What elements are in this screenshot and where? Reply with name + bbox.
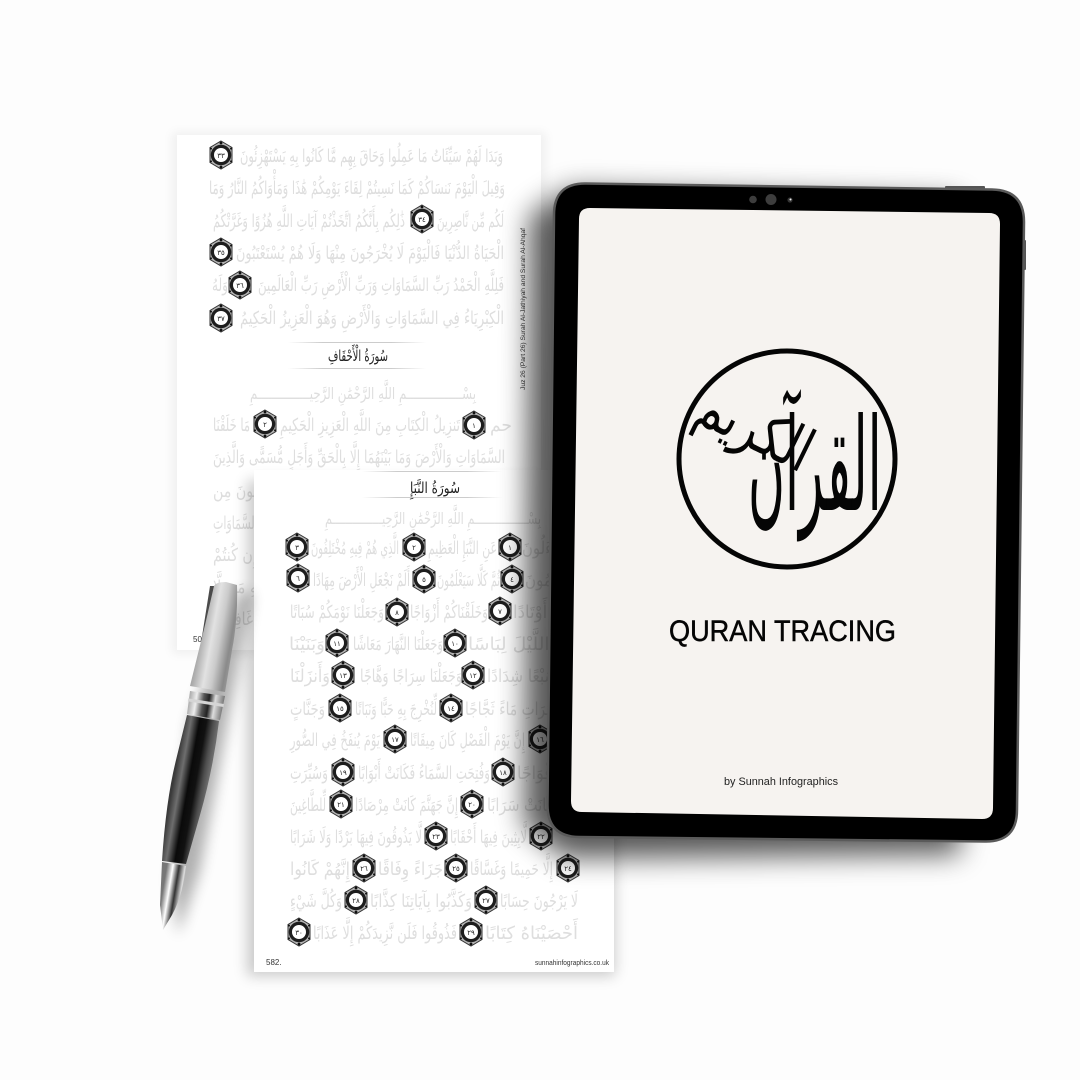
back page Arabic tracing lines: فَلِلَّهِ الْحَمْدُ رَبِّ السَّمَاوَاتِ وَرَبِّ الْأَرْضِ رَبِّ الْعَالَمِينَ <box>258 268 504 300</box>
front page verse markers: ٢٠ <box>468 801 476 809</box>
pen tip <box>160 862 186 930</box>
front page Arabic tracing lines <box>289 503 603 947</box>
back page Arabic tracing lines: وَلَهُ <box>212 274 228 296</box>
front page Arabic tracing lines: أَحْصَيْنَاهُ كِتَابًا <box>485 918 579 944</box>
tablet shadow <box>524 190 960 858</box>
back page Arabic tracing lines: بِسْــــــــــــــــمِ اللَّهِ الرَّحْمَٰنِ الرَّحِيـــــــــــــــمِ <box>249 378 477 407</box>
front page verse markers: ٢٥ <box>452 865 460 873</box>
front page Arabic tracing lines: وَجَعَلْنَا النَّهَارَ مَعَاشًا <box>353 630 443 655</box>
back page Arabic tracing lines: سُورَةُ الْأَحْقَافِ <box>328 344 388 365</box>
back page verse markers: ٣٣ <box>217 152 225 160</box>
logo: Al-Quran Al-Kareem roundel <box>679 351 895 567</box>
back page Arabic tracing lines: وَبَدَا لَهُمْ سَيِّئَاتُ مَا عَمِلُوا وَحَاقَ بِهِم مَّا كَانُوا بِهِ يَسْتَهْزِئُونَ <box>240 142 503 170</box>
back page Arabic tracing lines: حم <box>490 415 512 436</box>
back page verse markers: ٣٥ <box>217 249 225 257</box>
back page Arabic tracing lines <box>209 142 512 633</box>
front page Arabic tracing lines: وَخَلَقْنَاكُمْ أَزْوَاجًا <box>410 597 488 623</box>
back page Arabic tracing lines: السَّمَاوَاتِ وَالْأَرْضَ وَمَا بَيْنَهُمَا إِلَّا بِالْحَقِّ وَأَجَلٍ مُّسَمًّى وَالَّذِينَ <box>213 440 505 472</box>
front page verse markers: ١٨ <box>499 769 507 777</box>
front page Arabic tracing lines: وَأَنزَلْنَا <box>290 661 330 687</box>
front page Arabic tracing lines: وَفُتِحَتِ السَّمَاءُ فَكَانَتْ أَبْوَابًا <box>358 758 490 784</box>
back page verse markers: ١ <box>472 422 476 430</box>
front page verse markers: ١١ <box>333 640 341 648</box>
front page Arabic tracing lines: فَتَأْتُونَ أَفْوَاجًا <box>517 754 603 784</box>
front page verse markers: ٢٨ <box>352 897 360 905</box>
front page verse markers: ٣٠ <box>295 929 303 937</box>
back page verse markers <box>210 141 485 439</box>
front page verse markers: ١٤ <box>447 705 455 713</box>
back page Arabic tracing lines: يَسْتَجِيبُ لَهُ إِلَىٰ يَوْمِ الْقِيَامَةِ وَهُمْ عَن دُعَائِهِمْ غَافِلُونَ <box>213 605 506 633</box>
back page Arabic tracing lines: لَكُم مِّن نَّاصِرِينَ <box>437 208 505 234</box>
front page verse markers: ٢٣ <box>432 833 440 841</box>
pen cap <box>190 582 237 692</box>
front page verse markers: ١٠ <box>451 640 459 648</box>
panel: back worksheet page <box>172 132 546 654</box>
back page verse markers: ٢ <box>263 421 267 429</box>
back page Arabic tracing lines: ائْتُونِي بِكِتَابٍ مِّن قَبْلِ هَٰذَا أَوْ أَثَارَةٍ مِّنْ عِلْمٍ إِن كُنتُمْ <box>213 540 505 571</box>
front page website: sunnahinfographics.co.uk <box>535 960 609 967</box>
front page verse markers: ١٢ <box>469 672 477 680</box>
front page Arabic tracing lines: يَوْمَ يُنفَخُ فِي الصُّورِ <box>289 729 381 753</box>
front page Arabic tracing lines: لِّنُخْرِجَ بِهِ حَبًّا وَنَبَاتًا <box>355 693 438 722</box>
front page Arabic tracing lines: أَلَمْ نَجْعَلِ الْأَرْضَ مِهَادًا <box>313 565 411 593</box>
front page verse markers: ٢٧ <box>482 897 490 905</box>
logo: Al-Quran Al-Kareem roundel: الكريم <box>686 370 825 486</box>
front page verse markers: ٢٦ <box>360 865 368 873</box>
front page verse markers: ٥ <box>422 576 426 584</box>
front page Arabic tracing lines: فَذُوقُوا فَلَن نَّزِيدَكُمْ إِلَّا عَذَابًا <box>313 916 457 947</box>
front page verse markers: ٨ <box>395 609 399 617</box>
front page verse markers: ١٩ <box>339 769 347 777</box>
front page Arabic tracing lines: عَمَّ يَتَسَاءَلُونَ <box>522 534 602 559</box>
front page Arabic tracing lines: لِّلطَّاغِينَ <box>290 788 327 816</box>
back page Arabic tracing lines: الْحَيَاةُ الدُّنْيَا فَالْيَوْمَ لَا يُخْرَجُونَ مِنْهَا وَلَا هُمْ يُسْتَعْتَبُونَ <box>236 239 504 264</box>
logo: Al-Quran Al-Kareem roundel: القرآن <box>748 389 882 542</box>
front page verse markers: ١٧ <box>391 736 399 744</box>
front page number: 582. <box>266 958 282 967</box>
front page Arabic tracing lines: وَكُلَّ شَيْءٍ <box>290 887 342 912</box>
back page Arabic tracing lines: دُونِ اللَّهِ أَرُونِي مَاذَا خَلَقُوا مِنَ الْأَرْضِ أَمْ لَهُمْ شِرْكٌ فِي السَّمَاوَاتِ <box>213 506 505 538</box>
back page verse markers: ٣٤ <box>418 216 426 224</box>
front page Arabic tracing lines: وَسُيِّرَتِ <box>290 763 328 784</box>
tablet screen <box>571 208 1000 819</box>
front page verse markers: ٣ <box>295 544 299 552</box>
front page Arabic tracing lines: لَّا يَذُوقُونَ فِيهَا بَرْدًا وَلَا شَرَابًا <box>290 820 423 848</box>
front page Arabic tracing lines: عَنِ النَّبَإِ الْعَظِيمِ <box>427 534 497 562</box>
front page verse markers: ٢٢ <box>537 833 545 841</box>
title: QURAN TRACING <box>669 615 896 648</box>
front page verse markers: ٢٩ <box>467 929 475 937</box>
back page Arabic tracing lines: صَادِقِينَ وَمَنْ أَضَلُّ مِمَّن يَدْعُو مِن دُونِ اللَّهِ مَن لَّا <box>213 570 505 600</box>
back page number: 50 <box>193 635 202 644</box>
surah title <box>362 471 502 500</box>
front page verse markers: ١ <box>508 544 512 552</box>
front page Arabic tracing lines: ثُمَّ كَلَّا سَيَعْلَمُونَ <box>437 563 501 591</box>
front page Arabic tracing lines: لَّابِثِينَ فِيهَا أَحْقَابًا <box>450 820 528 849</box>
pen metal rings <box>187 691 225 720</box>
front page verse markers: ١٥ <box>336 705 344 713</box>
front page Arabic tracing lines: كَلَّا سَيَعْلَمُونَ <box>525 563 603 591</box>
front page Arabic tracing lines: وَجَعَلْنَا اللَّيْلَ لِبَاسًا <box>468 627 603 655</box>
tablet cameras <box>749 194 793 205</box>
front page Arabic tracing lines: وَالْجِبَالَ أَوْتَادًا <box>513 597 603 624</box>
surah title: سُورَةُ النَّبَإِ <box>409 479 460 500</box>
front page verse markers: ٧ <box>498 608 502 616</box>
front page verse markers: ٢١ <box>337 801 345 809</box>
front page Arabic tracing lines: وَجَعَلْنَا نَوْمَكُمْ سُبَاتًا <box>290 598 384 623</box>
front page Arabic tracing lines: بِسْــــــــــــــــمِ اللَّهِ الرَّحْمَٰنِ الرَّحِيـــــــــــــــمِ <box>324 503 542 532</box>
front page verse markers: ٤ <box>510 576 514 584</box>
front page Arabic tracing lines: إِنَّ جَهَنَّمَ كَانَتْ مِرْصَادًا <box>355 793 459 819</box>
front page Arabic tracing lines: إِنَّهُمْ كَانُوا <box>290 857 351 883</box>
panel: front worksheet page <box>254 470 614 972</box>
tablet side buttons <box>945 186 1026 270</box>
front page Arabic tracing lines: وَجَنَّاتٍ <box>290 697 325 721</box>
front page Arabic tracing lines: لَا يَرْجُونَ حِسَابًا <box>500 890 579 912</box>
back page Arabic tracing lines: تَنزِيلُ الْكِتَابِ مِنَ اللَّهِ الْعَزِيزِ الْحَكِيمِ <box>279 408 461 439</box>
back page verse markers: ٣٦ <box>236 282 244 290</box>
front page Arabic tracing lines: الَّذِي هُمْ فِيهِ مُخْتَلِفُونَ <box>311 531 399 559</box>
front page verse markers: ١٣ <box>339 672 347 680</box>
front page Arabic tracing lines: جَزَاءً وِفَاقًا <box>378 859 443 882</box>
back page Arabic tracing lines: ذَٰلِكُم بِأَنَّكُمُ اتَّخَذْتُمْ آيَاتِ اللَّهِ هُزُوًا وَغَرَّتْكُمُ <box>213 204 405 233</box>
front page Arabic tracing lines: إِلَّا حَمِيمًا وَغَسَّاقًا <box>470 852 554 883</box>
back page Arabic tracing lines: الْكِبْرِيَاءُ فِي السَّمَاوَاتِ وَالْأَرْضِ وَهُوَ الْعَزِيزُ الْحَكِيمُ <box>240 304 504 333</box>
icon: ballpoint pen <box>160 582 237 930</box>
pen barrel <box>162 715 219 864</box>
pen clip <box>197 586 216 668</box>
tablet body <box>547 183 1024 842</box>
front page Arabic tracing lines: الْجِبَالُ فَكَانَتْ سَرَابًا <box>487 791 603 817</box>
front page verse markers <box>286 533 579 946</box>
back page Arabic tracing lines: وَقِيلَ الْيَوْمَ نَنسَاكُمْ كَمَا نَسِيتُمْ لِقَاءَ يَوْمِكُمْ هَٰذَا وَمَأْوَاكُمُ النَّارُ وَمَا <box>209 169 505 199</box>
front page Arabic tracing lines: وَجَعَلْنَا سِرَاجًا وَهَّاجًا <box>360 662 462 687</box>
back page Arabic tracing lines: كَفَرُوا عَمَّا أُنذِرُوا مُعْرِضُونَ قُلْ أَرَأَيْتُم مَّا تَدْعُونَ مِن <box>213 473 505 504</box>
front page Arabic tracing lines: مِنَ الْمُعْصِرَاتِ مَاءً ثَجَّاجًا <box>465 695 603 720</box>
front page verse markers: ٢٤ <box>564 865 572 873</box>
panel: tablet <box>547 183 1026 842</box>
front page verse markers: ٦ <box>296 575 300 583</box>
front page Arabic tracing lines: وَبَنَيْنَا <box>289 634 325 655</box>
shadow of front page <box>247 480 615 976</box>
front page Arabic tracing lines: فَوْقَكُمْ سَبْعًا شِدَادًا <box>487 663 603 687</box>
front page verse markers: ١٦ <box>536 736 544 744</box>
pen shadow <box>172 590 252 935</box>
front page verse markers: ٢ <box>412 544 416 552</box>
back page Arabic tracing lines: مَا خَلَقْنَا <box>213 414 250 436</box>
back page verse markers: ٣٧ <box>217 315 225 323</box>
byline: by Sunnah Infographics <box>724 776 838 788</box>
back page side caption: Juz 26 (Part 26) Surah Al-Jathiyah and Surah Al-Ahqaf <box>520 228 527 390</box>
front page Arabic tracing lines: إِنَّ يَوْمَ الْفَصْلِ كَانَ مِيقَاتًا <box>410 726 526 754</box>
front page Arabic tracing lines: وَكَذَّبُوا بِآيَاتِنَا كِذَّابًا <box>370 888 472 913</box>
